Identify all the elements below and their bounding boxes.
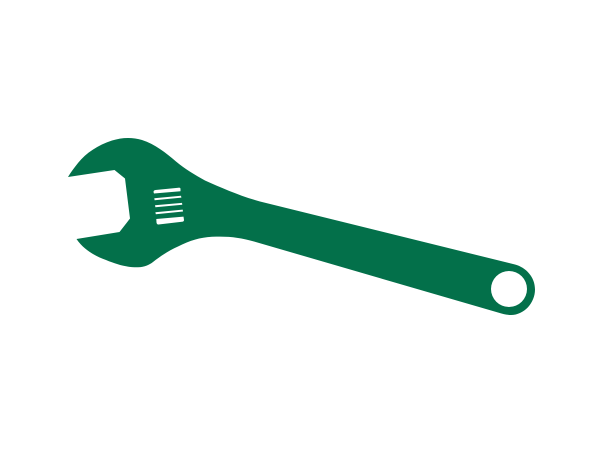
adjustment slots xyxy=(154,188,184,225)
wrench body xyxy=(68,138,535,315)
